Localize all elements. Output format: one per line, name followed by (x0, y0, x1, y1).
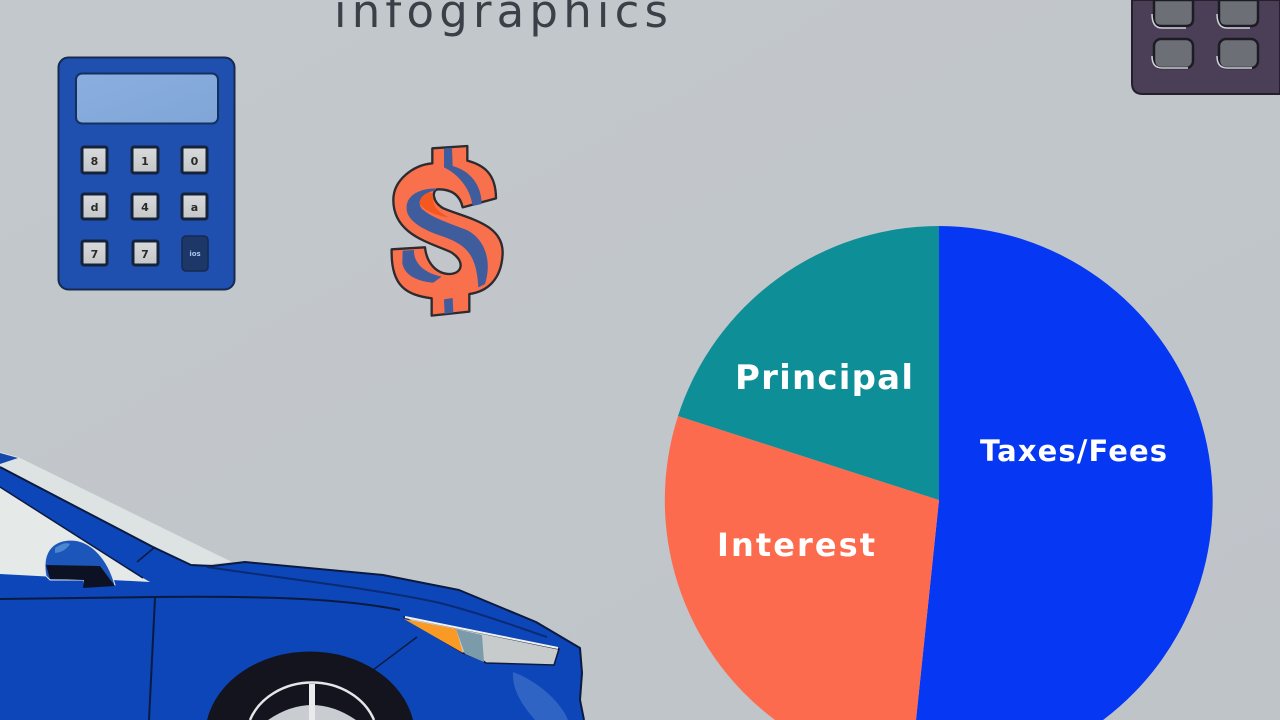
calculator keys: 4 (141, 201, 149, 214)
windshield glare (0, 452, 232, 566)
panel: partial keypad device, top right (1132, 0, 1280, 94)
icon: dollar sign (392, 146, 503, 316)
fender seam (373, 637, 417, 670)
wheel arch and tyre (207, 652, 413, 720)
front bumper highlight (513, 672, 568, 720)
label: Taxes/Fees: Taxes/Fees (980, 434, 1167, 468)
calculator keys: 8 (91, 155, 98, 168)
hood crease (207, 567, 547, 637)
side window (0, 487, 150, 582)
dollar inner shade (420, 192, 448, 217)
A-pillar seam (137, 547, 155, 562)
calculator keys: d (91, 201, 98, 214)
car outline (0, 467, 584, 720)
pie chart (665, 226, 1213, 720)
door seam (149, 598, 155, 720)
calculator keys: 0 (191, 155, 199, 168)
calculator keys: 7 (91, 248, 98, 261)
dollar blue stripes (444, 148, 482, 206)
label: Interest: Interest (717, 526, 875, 564)
label: Principal: Principal (735, 358, 913, 398)
calculator keys (82, 147, 208, 271)
illustration: blue car (0, 452, 584, 720)
slice: Taxes/Fees (916, 226, 1213, 720)
dollar glyph body (392, 146, 503, 316)
calculator keys: ios (189, 250, 201, 258)
beltline (0, 597, 400, 610)
slice: Principal (678, 226, 939, 500)
calculator keys: a (191, 201, 198, 214)
slice: Interest (665, 416, 939, 720)
calculator keys: 1 (141, 155, 149, 168)
wing mirror (45, 540, 115, 588)
calculator display (76, 74, 218, 124)
wheel rim (250, 683, 374, 720)
car body (0, 467, 584, 720)
calculator keys: 7 (141, 248, 149, 261)
headlight (404, 617, 559, 665)
icon: calculator (58, 58, 234, 290)
car roof tip (0, 453, 18, 464)
